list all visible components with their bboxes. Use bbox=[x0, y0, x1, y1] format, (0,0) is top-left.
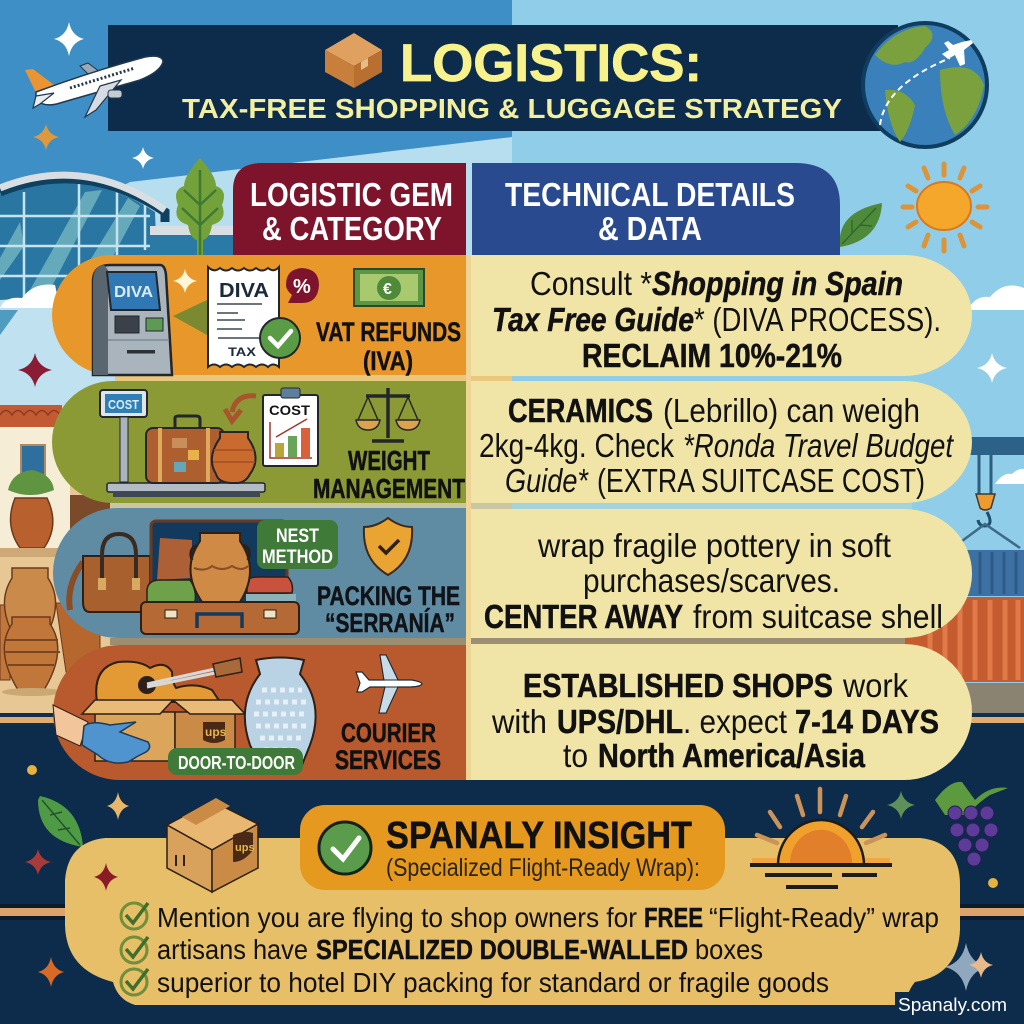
panel: weight details: (EXTRA SUITCASE COST) bbox=[597, 462, 925, 499]
icon: parcel with UPS mark: ups bbox=[205, 725, 227, 739]
panel: packing the Serrania bbox=[53, 508, 466, 638]
bullet two bbox=[121, 934, 763, 965]
label bbox=[335, 718, 441, 775]
column header: logistic gem and category: & CATEGORY bbox=[262, 210, 442, 247]
background: navy base bbox=[0, 713, 1024, 1024]
panel: courier details: UPS/DHL bbox=[557, 703, 683, 740]
panel: weight details bbox=[471, 381, 972, 503]
label: WEIGHT bbox=[348, 445, 430, 476]
background: airport terminal bbox=[0, 175, 235, 335]
row divider background bbox=[110, 255, 912, 780]
label bbox=[313, 445, 465, 504]
panel: VAT details: RECLAIM 10%-21% bbox=[582, 337, 842, 374]
panel: weight details: *Ronda Travel Budget bbox=[683, 427, 955, 464]
panel: courier details: work bbox=[842, 667, 908, 704]
icon: euro banknote: € bbox=[383, 281, 392, 298]
panel: weight details: (Lebrillo) can weigh bbox=[663, 392, 920, 429]
icon: DIVA tax receipt: TAX bbox=[228, 345, 256, 359]
column header: logistic gem and category: LOGISTIC GEM bbox=[250, 176, 453, 213]
icon: clay pot bbox=[212, 432, 256, 483]
icon: plane bbox=[356, 655, 422, 713]
icon: percent bubble bbox=[286, 268, 319, 303]
panel: courier details: with bbox=[491, 703, 547, 740]
icon: leather handbag bbox=[69, 534, 150, 612]
panel: weight details: Guide* bbox=[505, 462, 589, 499]
background: split sky bbox=[0, 0, 1024, 730]
watermark: Spanaly.com: Spanaly.com bbox=[898, 995, 1007, 1015]
bullet one bbox=[121, 902, 939, 933]
icon: rising cost clipboard bbox=[263, 388, 318, 466]
bullet two: boxes bbox=[695, 934, 763, 965]
icon: shield bbox=[364, 518, 412, 575]
panel: weight details: 2kg-4kg. Check bbox=[479, 427, 674, 464]
panel: VAT details: Tax Free Guide bbox=[492, 301, 694, 338]
label: PACKING THE bbox=[317, 581, 460, 611]
icon: luggage scale bbox=[100, 390, 265, 497]
icon: DIVA tax receipt: DIVA bbox=[219, 280, 269, 302]
icon: approved check bbox=[260, 318, 300, 358]
icon: green leaf bbox=[38, 796, 83, 847]
panel: VAT refunds bbox=[52, 255, 466, 376]
icon: balance scale bbox=[356, 388, 420, 441]
column header: logistic gem and category bbox=[233, 163, 466, 255]
label: (IVA) bbox=[363, 346, 413, 376]
panel: VAT details: Consult * bbox=[530, 265, 652, 302]
column header: technical details and data bbox=[472, 163, 840, 255]
badge: door to door: DOOR-TO-DOOR bbox=[178, 753, 295, 773]
label: COURIER bbox=[341, 718, 436, 748]
panel: VAT details bbox=[471, 255, 972, 376]
icon: sunset bbox=[750, 789, 892, 887]
label: “SERRANÍA” bbox=[325, 607, 455, 638]
icon: tree bbox=[176, 158, 224, 255]
icon: euro banknote bbox=[354, 269, 424, 306]
title banner bbox=[108, 25, 898, 131]
icon: guitar bbox=[96, 658, 242, 702]
label bbox=[316, 317, 461, 376]
panel: courier details: 7-14 DAYS bbox=[795, 703, 939, 740]
panel: packing details: from suitcase shell bbox=[693, 598, 943, 635]
panel: weight details: CERAMICS bbox=[508, 392, 653, 429]
icon: DIVA kiosk bbox=[93, 265, 172, 375]
icon: DIVA tax receipt bbox=[208, 267, 279, 367]
panel: courier details bbox=[471, 644, 972, 780]
badge: Spanaly insight heading bbox=[300, 805, 725, 890]
icon: cardboard box bbox=[325, 33, 382, 88]
background: crane and containers bbox=[905, 437, 1024, 713]
label: MANAGEMENT bbox=[313, 473, 465, 504]
icon: rising cost clipboard: COST bbox=[269, 402, 310, 418]
panel: VAT details: * (DIVA PROCESS). bbox=[694, 301, 941, 338]
bullet three: superior to hotel DIY packing for standard or fragile goods bbox=[157, 967, 829, 998]
panel: VAT details: Shopping in Spain bbox=[652, 265, 903, 302]
panel: courier services bbox=[53, 645, 466, 780]
icon: luggage scale: COST bbox=[108, 397, 139, 412]
icon: parcel with UPS mark bbox=[82, 700, 245, 761]
panel: courier details: to bbox=[563, 737, 588, 774]
star bbox=[94, 863, 118, 891]
panel: packing details: wrap fragile pottery in soft bbox=[537, 527, 891, 564]
title text: LOGISTICS: bbox=[400, 34, 702, 93]
panel: weight management bbox=[52, 381, 466, 504]
label: VAT REFUNDS bbox=[316, 317, 461, 347]
watermark: Spanaly.com bbox=[895, 992, 1010, 1020]
panel: courier details: ESTABLISHED SHOPS bbox=[523, 667, 833, 704]
star bbox=[173, 269, 197, 293]
icon: DIVA kiosk: DIVA bbox=[114, 284, 153, 301]
icon: clay amphora bbox=[190, 533, 250, 602]
panel: courier details: . expect bbox=[683, 703, 787, 740]
bullet one: Mention you are flying to shop owners for bbox=[157, 902, 637, 933]
badge: door to door bbox=[168, 748, 303, 775]
background: village building and pots bbox=[0, 405, 110, 696]
icon: UPS parcel: ups bbox=[235, 842, 255, 854]
panel: packing details: CENTER AWAY bbox=[484, 598, 683, 635]
badge: nest method bbox=[257, 520, 338, 569]
icon: UPS parcel bbox=[167, 798, 258, 892]
icon: open suitcase bbox=[141, 521, 299, 634]
icon: globe with flight path bbox=[863, 23, 987, 147]
icon: leaf near header bbox=[840, 203, 882, 247]
panel: Spanaly insight bbox=[65, 789, 960, 1005]
bullet two: artisans have bbox=[157, 934, 308, 965]
panel: packing details bbox=[471, 509, 972, 638]
bullet one: FREE bbox=[644, 902, 703, 933]
bullet one: “Flight-Ready” wrap bbox=[709, 902, 939, 933]
badge: Spanaly insight heading: SPANALY INSIGHT bbox=[386, 815, 692, 857]
background: clouds right bbox=[968, 285, 1024, 484]
badge: nest method: METHOD bbox=[262, 547, 333, 568]
bullet two: SPECIALIZED DOUBLE-WALLED bbox=[316, 934, 688, 965]
bullet list bbox=[121, 902, 939, 998]
arrow bbox=[173, 300, 207, 335]
icon: sun bbox=[903, 164, 987, 251]
icon: gloved hand bbox=[53, 705, 150, 763]
icon: porcelain vase bbox=[245, 658, 316, 770]
icon: suitcase bbox=[146, 416, 224, 483]
column header: technical details and data: & DATA bbox=[598, 210, 702, 247]
panel: packing details: purchases/scarves. bbox=[583, 562, 840, 599]
icon: grapes bbox=[935, 782, 1008, 866]
label: SERVICES bbox=[335, 745, 441, 775]
label bbox=[317, 581, 460, 638]
subtitle text: TAX-FREE SHOPPING & LUGGAGE STRATEGY bbox=[182, 93, 842, 124]
badge: Spanaly insight heading: (Specialized Flight-Ready Wrap): bbox=[386, 854, 700, 882]
column header: technical details and data: TECHNICAL DETAILS bbox=[505, 176, 795, 213]
panel: courier details: North America/Asia bbox=[598, 737, 866, 774]
icon: airplane bbox=[25, 56, 163, 117]
icon: percent bubble: % bbox=[293, 276, 311, 298]
icon: curved arrow bbox=[225, 396, 256, 421]
badge: nest method: NEST bbox=[276, 526, 319, 547]
